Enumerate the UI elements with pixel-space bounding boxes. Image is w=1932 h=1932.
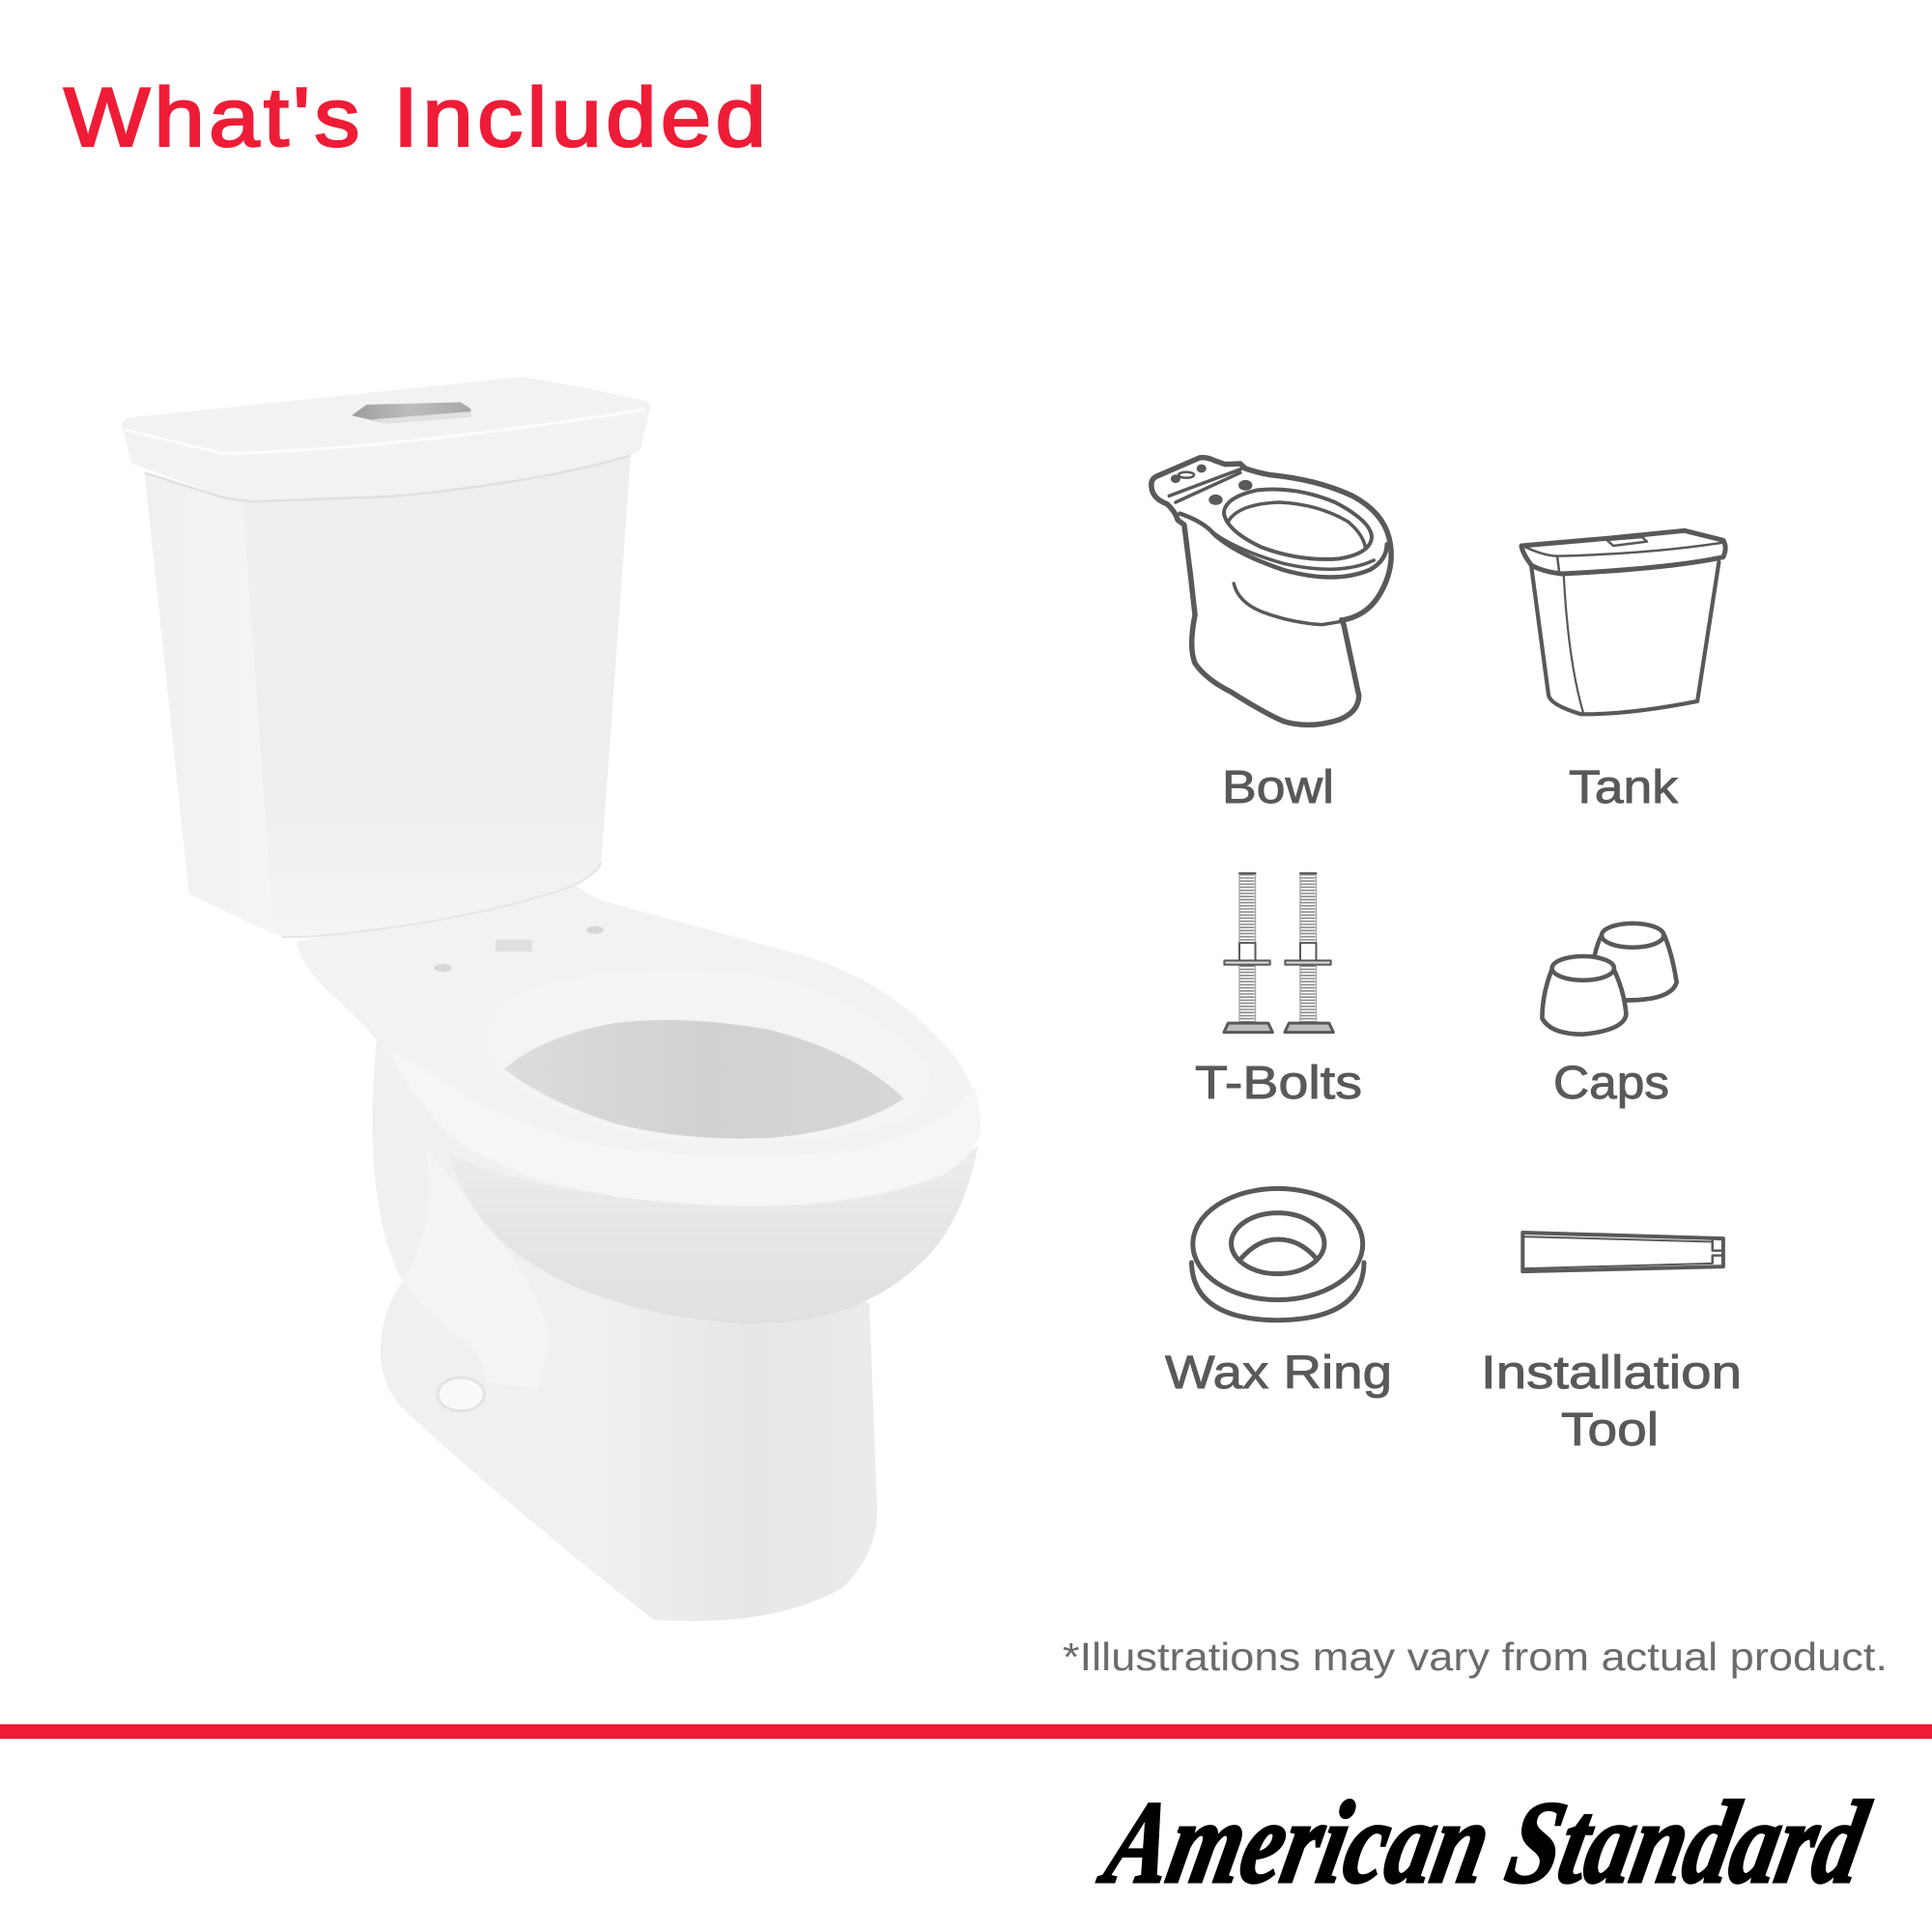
deck and rim xyxy=(297,884,980,1206)
flush button xyxy=(352,402,470,423)
toilet tank xyxy=(122,377,650,937)
bolt cap xyxy=(438,1378,484,1411)
tank body xyxy=(145,456,631,936)
base side recess xyxy=(403,1146,550,1389)
bolt left xyxy=(1224,873,1272,1033)
icon: t-bolts xyxy=(1224,873,1333,1033)
tank bottom edge xyxy=(281,863,602,937)
icon: tank xyxy=(1521,530,1725,714)
bolt right xyxy=(1285,873,1333,1033)
label: t-bolts: T-Bolts xyxy=(1195,1058,1362,1109)
icon: caps xyxy=(1542,923,1677,1035)
footnote: *Illustrations may vary from actual product. xyxy=(1063,1634,1888,1679)
label: bowl: Bowl xyxy=(1222,762,1334,813)
red divider bar xyxy=(0,1724,1932,1739)
toilet bowl xyxy=(297,884,980,1621)
rim lower band xyxy=(390,1052,980,1206)
lid edge highlight xyxy=(125,410,645,454)
rim inner slope xyxy=(487,969,930,1145)
deck logo xyxy=(496,940,532,952)
tank lid xyxy=(122,377,650,500)
icon: bowl xyxy=(1151,458,1391,724)
seat bolt holes xyxy=(435,964,451,972)
flush button highlight xyxy=(372,412,470,423)
bowl well xyxy=(504,1020,904,1139)
tank side face xyxy=(145,473,274,934)
icon: installation tool xyxy=(1522,1233,1723,1271)
lid shadow line xyxy=(145,456,631,501)
label: installation tool: Tool xyxy=(1561,1405,1659,1456)
product photo: toilet xyxy=(122,377,980,1621)
label: wax ring: Wax Ring xyxy=(1165,1348,1392,1399)
bowl base xyxy=(372,1017,877,1621)
label: tank: Tank xyxy=(1569,762,1679,813)
label: installation tool: Installation xyxy=(1481,1348,1742,1399)
label: caps: Caps xyxy=(1553,1058,1669,1109)
icon: wax ring xyxy=(1191,1188,1364,1321)
title: What's Included xyxy=(64,71,766,164)
bowl underside xyxy=(449,1146,978,1323)
